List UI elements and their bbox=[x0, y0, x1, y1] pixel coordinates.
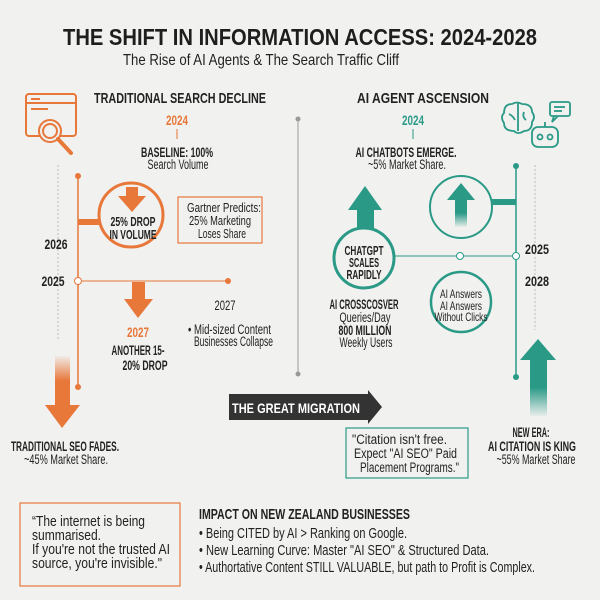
arrow: great migration: THE GREAT MIGRATION bbox=[232, 400, 360, 416]
year labels right bbox=[525, 242, 549, 289]
traditional seo fades bbox=[11, 439, 119, 467]
traditional seo fades: ~45% Market Share. bbox=[24, 452, 108, 467]
right timeline bbox=[395, 163, 535, 380]
crossover stats: Queries/Day bbox=[340, 310, 391, 325]
subtitle: The Rise of AI Agents & The Search Traffic Cliff bbox=[123, 52, 399, 69]
circle: chatgpt: CHATGPT bbox=[344, 244, 384, 258]
quote box bbox=[20, 503, 180, 586]
circle: ai answers bbox=[431, 272, 491, 332]
callout: citation: "Citation isn't free. bbox=[352, 432, 447, 447]
impact panel: IMPACT ON NEW ZEALAND BUSINESSES bbox=[199, 506, 410, 523]
crossover stats: AI CROSSCOSVER bbox=[330, 297, 399, 312]
arrow: big teal up bbox=[520, 339, 556, 416]
quote box: “The internet is being bbox=[32, 513, 145, 530]
callout: citation: Expect "AI SEO" Paid bbox=[354, 446, 457, 461]
circle: chatgpt: SCALES bbox=[349, 256, 379, 270]
arrow: down 2027 bbox=[124, 282, 153, 318]
heading: ai agent ascension: AI AGENT ASCENSION bbox=[357, 90, 489, 107]
2027 bullets: 2027 bbox=[214, 298, 236, 313]
circle: chatgpt bbox=[334, 228, 394, 288]
another drop: 20% DROP bbox=[122, 358, 168, 373]
traditional seo fades: TRADITIONAL SEO FADES. bbox=[11, 439, 119, 454]
circle: ai answers: AI Answers bbox=[440, 287, 482, 301]
another drop: ANOTHER 15- bbox=[112, 343, 164, 358]
title: THE SHIFT IN INFORMATION ACCESS: 2024-2028 bbox=[63, 24, 537, 50]
arrow: great migration bbox=[229, 390, 382, 424]
crossover stats: Weekly Users bbox=[340, 335, 393, 350]
callout: gartner: 25% Marketing bbox=[189, 213, 251, 228]
callout: gartner: Gartner Predicts: bbox=[187, 200, 261, 215]
crossover stats: 800 MILLION bbox=[338, 323, 392, 338]
callout: citation bbox=[346, 428, 468, 478]
another drop bbox=[112, 325, 168, 373]
callout: citation: Placement Programs." bbox=[360, 460, 459, 475]
quote box: If you're not the trusted AI bbox=[32, 541, 170, 558]
circle: ai answers: AI Answers bbox=[440, 299, 482, 313]
another drop: 2027 bbox=[127, 325, 149, 340]
icon: brain robot bbox=[502, 102, 570, 147]
impact panel bbox=[199, 506, 535, 576]
impact panel: • Being CITED by AI > Ranking on Google. bbox=[199, 526, 407, 542]
right 2024: 2024 bbox=[402, 113, 424, 128]
circle: up arrow bbox=[430, 176, 492, 238]
divider bbox=[297, 119, 299, 374]
circle: 25% drop bbox=[99, 183, 163, 247]
year labels left: 2026 bbox=[44, 237, 68, 252]
year labels right: 2025 bbox=[525, 242, 549, 257]
callout: gartner: Loses Share bbox=[198, 226, 246, 241]
chatbots emerge bbox=[356, 145, 456, 172]
left timeline bbox=[58, 165, 102, 390]
left 2024: 2024 bbox=[166, 113, 188, 128]
year labels left: 2025 bbox=[42, 274, 65, 289]
heading: traditional search decline: TRADITIONAL SEARCH DECLINE bbox=[94, 90, 266, 107]
arrow: teal up chatgpt bbox=[348, 186, 382, 231]
icon: browser search bbox=[26, 94, 76, 153]
circle: chatgpt: RAPIDLY bbox=[346, 268, 382, 282]
new era: NEW ERA: bbox=[512, 425, 550, 440]
2027 bullets: • Mid-sized Content bbox=[188, 322, 271, 337]
circle: 25% drop: IN VOLUME bbox=[110, 227, 157, 242]
baseline text: BASELINE: 100% bbox=[141, 145, 213, 160]
circle: 25% drop: 25% DROP bbox=[110, 214, 156, 229]
chatbots emerge: ~5% Market Share. bbox=[368, 157, 446, 172]
arrow: big down orange bbox=[45, 356, 80, 428]
circle: ai answers: Without Clicks bbox=[434, 310, 488, 324]
horizontal 2027 line bbox=[74, 278, 231, 284]
baseline text: Search Volume bbox=[148, 157, 208, 172]
2027 bullets: Businesses Collapse bbox=[194, 334, 273, 349]
new era bbox=[488, 425, 576, 467]
year labels right: 2028 bbox=[525, 274, 549, 289]
crossover stats bbox=[330, 297, 399, 350]
left 2024 bbox=[166, 113, 188, 139]
quote box: source, you're invisible." bbox=[32, 555, 162, 572]
baseline text bbox=[141, 145, 213, 172]
year labels left bbox=[42, 237, 68, 289]
chatbots emerge: AI CHATBOTS EMERGE. bbox=[356, 145, 456, 160]
right 2024 bbox=[402, 113, 424, 139]
callout: gartner bbox=[178, 197, 262, 243]
2027 bullets bbox=[188, 298, 273, 349]
quote box: summarised. bbox=[32, 527, 101, 544]
impact panel: • New Learning Curve: Master "AI SEO" & Structured Data. bbox=[199, 543, 489, 559]
